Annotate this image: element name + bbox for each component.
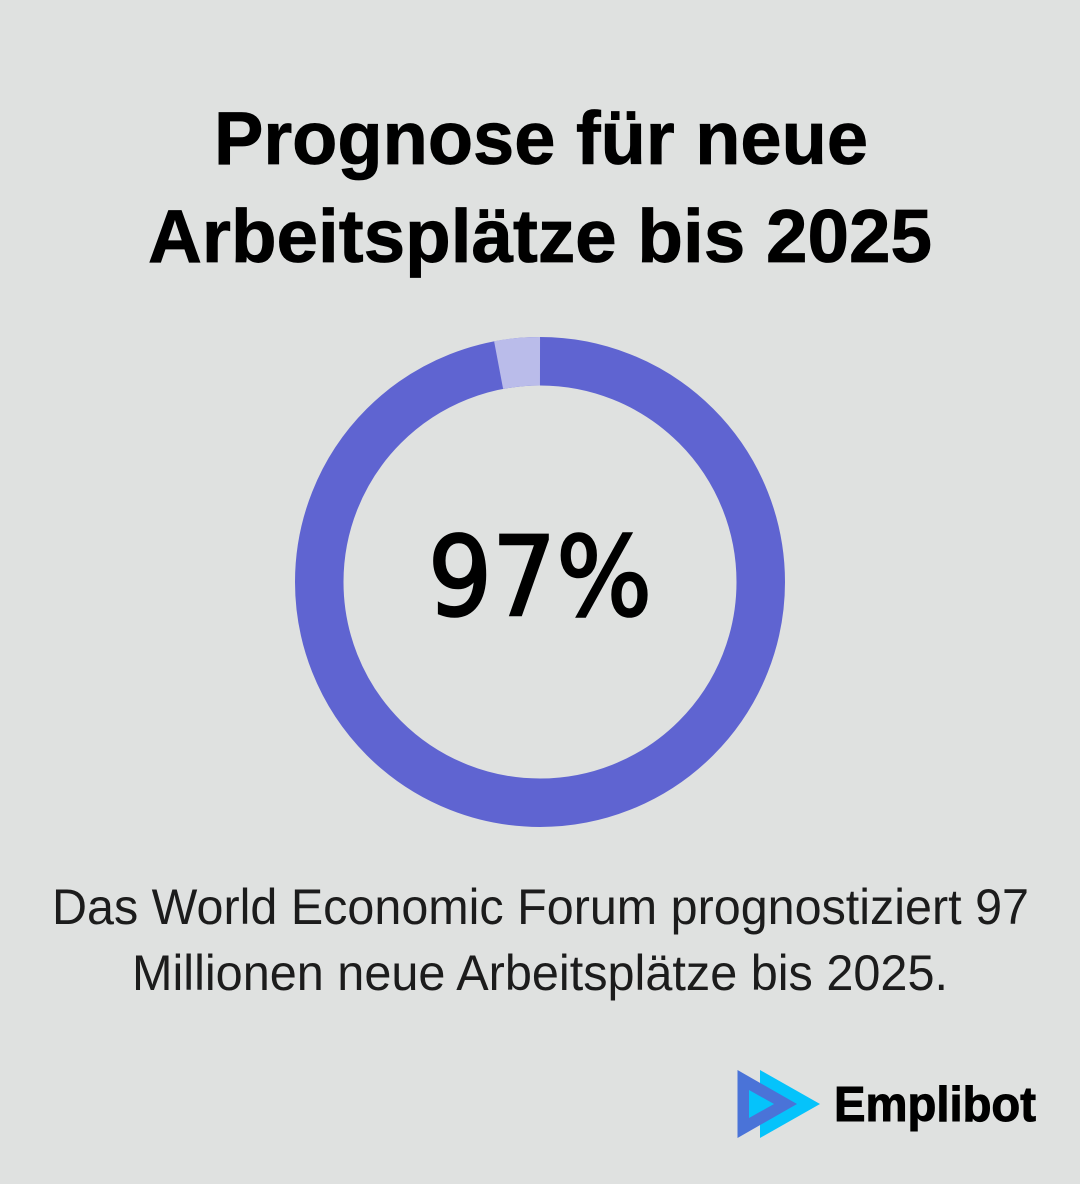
description text: Millionen neue Arbeitsplätze bis 2025. [132,945,948,1001]
logo wordmark: Emplibot [834,1078,1036,1132]
title: Arbeitsplätze bis 2025 [148,194,932,278]
donut chart: 97% [319,361,761,803]
icon: play triangles [738,1070,820,1138]
logo: Emplibot [738,1070,1036,1138]
title: Prognose für neue [214,96,868,180]
title [148,96,932,278]
description text: Das World Economic Forum prognostiziert 97 [52,879,1029,935]
donut value: 97% [428,513,652,641]
description text [52,879,1029,1001]
